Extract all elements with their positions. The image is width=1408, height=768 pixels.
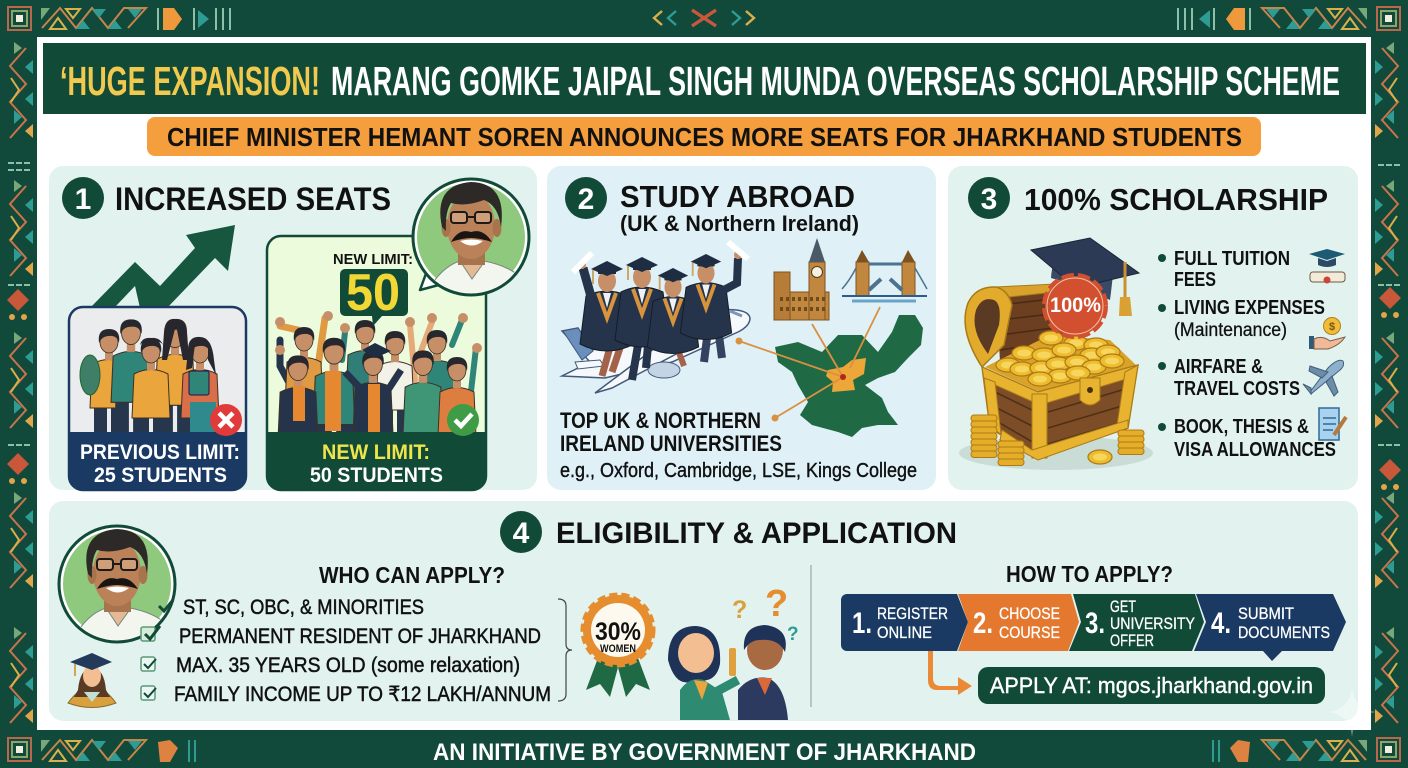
item: airfare: AIRFARE & (1174, 356, 1263, 378)
item: tuition: FEES (1174, 269, 1216, 291)
heading: who can apply: WHO CAN APPLY? (319, 562, 505, 588)
item: airfare (1158, 356, 1300, 400)
footer text: AN INITIATIVE BY GOVERNMENT OF JHARKHAND (433, 739, 976, 766)
label: new limit: NEW LIMIT: (322, 441, 430, 464)
sparkle watermark (1328, 687, 1376, 737)
illustration: treasure chest (959, 284, 1153, 470)
step 3: UNIVERSITY (1110, 614, 1195, 633)
chest body (982, 365, 1138, 460)
step 2: 2. (973, 607, 993, 640)
icon: graduation cap (1031, 238, 1139, 316)
illustration: students with questions (668, 583, 799, 720)
portrait speech bubble (413, 179, 529, 297)
step 4 (1194, 594, 1346, 661)
heading: 1 increased seats: 1 (75, 183, 91, 216)
step 1: REGISTER (877, 604, 948, 623)
step 4: 4. (1211, 607, 1231, 640)
panel 4: eligibility and application (49, 501, 1358, 721)
heading: 1 increased seats (62, 177, 391, 219)
icon: airplane (1303, 360, 1344, 396)
icon: green check (447, 404, 479, 436)
panel 2: study abroad (547, 166, 936, 490)
item: book thesis visa: BOOK, THESIS & (1174, 416, 1309, 438)
panel 1: increased seats (49, 166, 537, 493)
item: book thesis visa: VISA ALLOWANCES (1174, 439, 1336, 461)
text: universities: TOP UK & NORTHERN (560, 408, 761, 433)
icon: cap and diploma (1309, 249, 1345, 284)
icon: hand with coin: $ (1329, 321, 1335, 333)
label: previous limit: 25 STUDENTS (94, 464, 227, 487)
title banner: ‘HUGE EXPANSION! (60, 58, 320, 104)
badge: 100%: 100% (1050, 294, 1101, 317)
icon: tower bridge (842, 250, 927, 301)
step 1: 1. (852, 607, 872, 640)
badge: 30% women: 30% (595, 618, 641, 646)
badge: 30% women: WOMEN (600, 643, 636, 655)
icon: hand with coin (1309, 318, 1345, 349)
item: income: FAMILY INCOME UP TO ₹12 LAKH/ANNUM (174, 683, 551, 706)
illustration: graduates on airplane (562, 242, 750, 393)
coin pile (985, 331, 1136, 392)
step 4: SUBMIT (1238, 604, 1294, 623)
heading: 4 eligibility (500, 511, 957, 553)
heading: 4 eligibility: ELIGIBILITY & APPLICATION (556, 517, 957, 550)
card: previous limit (69, 307, 246, 490)
step 3: 3. (1085, 607, 1105, 640)
icon: red cross (210, 404, 242, 436)
heading: how to apply: HOW TO APPLY? (1006, 561, 1173, 587)
item: airfare: TRAVEL COSTS (1174, 378, 1300, 400)
icon: graduate girl (68, 653, 116, 708)
item: tuition: FULL TUITION (1174, 248, 1290, 270)
badge: 100% (1045, 276, 1105, 336)
list: eligibility criteria (141, 596, 551, 706)
label: new limit: 50 STUDENTS (310, 464, 443, 487)
item: living expenses: LIVING EXPENSES (1174, 297, 1325, 319)
heading: 1 increased seats: INCREASED SEATS (115, 181, 391, 217)
step 3 (1069, 594, 1204, 651)
subtitle ribbon: CHIEF MINISTER HEMANT SOREN ANNOUNCES MORE SEATS FOR JHARKHAND STUDENTS (167, 122, 1242, 152)
heading: 2 study abroad: (UK & Northern Ireland) (620, 211, 859, 236)
growth arrow (90, 225, 235, 308)
step 3: OFFER (1110, 631, 1154, 650)
heading: 3 100% scholarship: 3 (981, 183, 997, 216)
divider (810, 565, 812, 707)
heading: 2 study abroad: STUDY ABROAD (620, 179, 855, 214)
text: universities: IRELAND UNIVERSITIES (560, 431, 782, 456)
step 3: GET (1110, 597, 1136, 616)
title banner (43, 43, 1366, 114)
portrait: chief minister (59, 526, 175, 644)
button: apply at (978, 667, 1325, 704)
label: new limit (267, 432, 486, 490)
heading: 3 100% scholarship: 100% SCHOLARSHIP (1024, 182, 1328, 217)
heading: 2 study abroad (565, 177, 859, 236)
item: age: MAX. 35 YEARS OLD (some relaxation) (176, 654, 520, 677)
card: new limit (267, 236, 486, 493)
item: residence: PERMANENT RESIDENT OF JHARKHAND (179, 625, 541, 648)
item: category: ST, SC, OBC, & MINORITIES (183, 596, 424, 619)
button: apply at: APPLY AT: mgos.jharkhand.gov.in (990, 673, 1313, 698)
step 4: DOCUMENTS (1238, 623, 1330, 642)
heading: 4 eligibility: 4 (513, 517, 530, 550)
step 2 (958, 594, 1079, 651)
item: living expenses (1158, 297, 1325, 341)
icon: big ben and parliament (774, 238, 829, 320)
text: universities (560, 408, 917, 482)
heading: 3 100% scholarship (968, 177, 1328, 219)
icons: question marks: ? (787, 624, 799, 645)
label: new limit small: NEW LIMIT: (333, 251, 413, 268)
badge: 30% women (583, 595, 653, 697)
icons: question marks (732, 583, 799, 645)
item: book thesis visa (1158, 416, 1336, 461)
step 1 (841, 594, 968, 651)
list: covered costs (1158, 248, 1336, 461)
item: tuition (1158, 248, 1290, 291)
brace (558, 599, 572, 701)
label: previous limit: PREVIOUS LIMIT: (80, 441, 240, 464)
icons: question marks: ? (765, 583, 788, 625)
heading: 2 study abroad: 2 (578, 183, 594, 216)
step 1: ONLINE (877, 623, 932, 642)
arrow: register to apply (928, 651, 972, 695)
chest lid (965, 284, 1085, 367)
coin stacks (971, 415, 1144, 466)
text: universities: e.g., Oxford, Cambridge, LSE, Kings College (560, 460, 917, 482)
step 2: CHOOSE (999, 604, 1060, 623)
icon: document and pen (1319, 408, 1346, 440)
label: previous limit (69, 432, 246, 490)
step 2: COURSE (999, 623, 1060, 642)
panel 3: scholarship (948, 166, 1358, 490)
icons: question marks: ? (732, 596, 747, 624)
airplane (562, 310, 750, 393)
item: living expenses: (Maintenance) (1174, 320, 1287, 341)
badge: 50: 50 (346, 264, 400, 322)
process: four steps (841, 594, 1346, 661)
map: Jharkhand (736, 307, 923, 437)
